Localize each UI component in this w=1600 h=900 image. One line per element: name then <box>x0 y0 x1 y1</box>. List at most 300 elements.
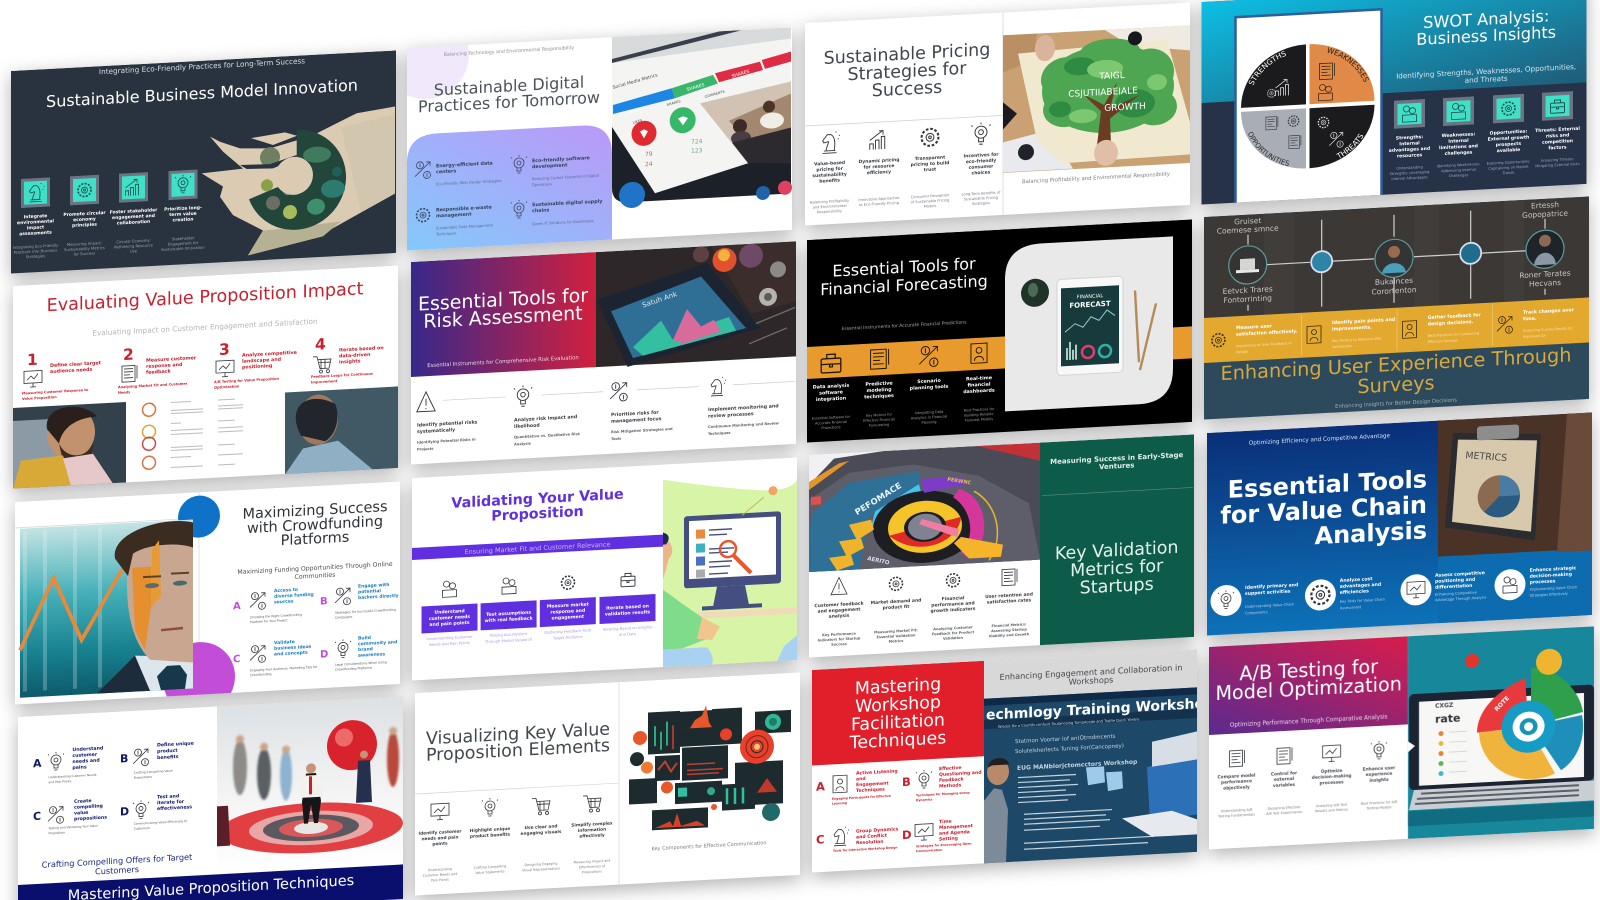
title: Platforms <box>281 530 349 549</box>
orange band: Identify pain points and <box>1332 318 1395 326</box>
icon tile 4 <box>168 170 198 200</box>
purple boxes <box>422 594 656 633</box>
white panel <box>1236 9 1382 207</box>
item labels: development <box>532 162 568 170</box>
subtitle: Identifying Strengths, Weaknesses, Opportunities, <box>1396 62 1576 81</box>
title: Sustainable Business Model Innovation <box>46 75 358 111</box>
notes: Legal Considerations When Using <box>335 660 387 667</box>
labels: Financial <box>942 596 964 602</box>
labels: Opportunities: <box>1490 130 1527 137</box>
item notes: Techniques <box>435 231 457 237</box>
labels: Strengths: <box>1396 135 1423 142</box>
labels: advantages and <box>1340 582 1381 590</box>
photo: training workshop board <box>984 687 1204 864</box>
labels: Foster stakeholder <box>110 208 157 216</box>
notes: Continuous Monitoring and Review <box>708 421 779 429</box>
labels: differentiation <box>1435 583 1472 591</box>
subtitle: Optimizing Performance Through Comparative Analysis <box>1230 714 1388 729</box>
labels: financial <box>968 381 991 389</box>
notes: Implementing Value Chain <box>1530 585 1577 592</box>
photo: bearded man <box>13 402 126 489</box>
notes: A/B Test Experiments <box>1266 810 1302 816</box>
notes: Strategies <box>972 201 990 206</box>
labels: Optimize <box>1321 769 1342 775</box>
letters: A <box>816 779 825 794</box>
subtitle: Customers <box>95 864 139 876</box>
subtitle: Ventures <box>1099 461 1134 471</box>
orange band: design decisions. <box>1428 319 1473 328</box>
box labels: and pain points <box>429 620 470 628</box>
slide: Sustainable Pricing Strategies <box>805 2 1190 226</box>
notes: Capitalizing on Market <box>1488 165 1529 171</box>
item labels: chains <box>532 207 550 214</box>
labels: benefits <box>819 178 840 185</box>
labels: Threats: External <box>1535 127 1580 134</box>
step notes: A/B Testing for Value Proposition <box>214 377 279 384</box>
title: Financial Forecasting <box>820 271 988 299</box>
notes: Financial Metrics: <box>992 622 1026 628</box>
item notes: Reducing Carbon Footprint in Digital <box>532 174 599 181</box>
photo: user journey diagram: Roner Terates <box>1519 268 1571 280</box>
letters: B <box>320 596 328 608</box>
notes: Understanding Customer Needs <box>48 773 96 779</box>
labels: information <box>578 826 606 834</box>
labels: Weaknesses: <box>1442 132 1475 139</box>
photo: social media metrics dashboard: COMMENTS <box>704 89 726 99</box>
labels: product fit <box>883 604 910 611</box>
notes: Strategies for Successful Crowdfunding <box>335 608 396 615</box>
title: Strategies for <box>848 59 967 85</box>
blue headings: sources <box>274 598 294 606</box>
photo: tablet with forecast <box>1005 236 1173 411</box>
labels: efficiency <box>867 169 891 176</box>
SWOT pie <box>1241 44 1374 168</box>
notes <box>250 608 396 677</box>
labels: insights <box>1369 777 1389 784</box>
photo: tablet on desk: Satuh Ank <box>641 290 679 309</box>
orange band: satisfaction effectively. <box>1236 328 1298 338</box>
notes: Gathering Feedback from <box>544 628 591 635</box>
blue headings: Engage with <box>358 583 389 590</box>
slide: Evaluating Value Proposition Impact <box>13 265 398 489</box>
labels: software <box>819 389 844 397</box>
orange band: improvements. <box>1332 325 1372 333</box>
labels: Integrate <box>24 214 47 220</box>
labels: pricing to build <box>911 160 949 168</box>
notes: Designing Engaging <box>525 861 557 867</box>
letters: D <box>902 828 912 842</box>
orange band: Satisfaction <box>1332 344 1353 349</box>
labels: engaging visuals <box>521 829 562 837</box>
notes: Propositions <box>134 775 152 780</box>
photo: tree of sustainable growth: TAIGL <box>1098 71 1125 82</box>
subtitle: Integrating Eco-Friendly Practices for Long-Term Success <box>99 56 305 76</box>
labels: Simplify complex <box>571 821 613 829</box>
notes <box>426 625 652 647</box>
item notes: Eco-Friendly Web Design Strategies <box>436 179 502 186</box>
notes: Analyzing Threats: <box>1541 157 1574 163</box>
labels: sustainability <box>812 171 847 179</box>
labels: Transparent <box>915 155 945 162</box>
photo: user journey diagram: Fontorrinting <box>1224 293 1272 305</box>
title: Sustainable Pricing <box>824 40 990 69</box>
labels: processes <box>1320 779 1344 786</box>
labels: satisfaction rates <box>987 597 1032 606</box>
supporting notes: Measuring Impact: <box>67 240 102 247</box>
notes: Forecasting <box>869 423 889 428</box>
headings: Management <box>939 823 974 831</box>
letters: A <box>33 757 42 770</box>
labels: Highlight unique <box>470 827 510 834</box>
purple band <box>412 535 663 560</box>
blue headings: backers directly <box>358 593 399 601</box>
SWOT pie: STRENGTHS <box>1248 50 1286 86</box>
step notes: Optimization <box>214 384 240 390</box>
headings: Define unique <box>157 742 194 749</box>
subtitle: Evaluating Impact on Customer Engagement and Satisfaction <box>92 317 318 338</box>
headings: Effective <box>939 766 962 772</box>
SWOT pie: WEAKNESSES <box>1328 47 1369 82</box>
labels: points <box>432 841 448 847</box>
title: Metrics for <box>1070 556 1164 581</box>
notes: Platform for Your Project <box>250 618 288 624</box>
supporting notes: Strategies <box>26 253 45 259</box>
labels: Internal <box>1399 140 1420 147</box>
slide: A/B Testing for Model Optimization <box>1209 626 1594 850</box>
orange band: Improved UX <box>1523 334 1546 339</box>
slide: Maximizing Success with Crowdfunding <box>15 481 400 724</box>
labels: advantages and <box>1389 146 1430 154</box>
notes: Analysis <box>514 442 531 446</box>
labels: Enhance strategic <box>1530 566 1576 574</box>
title: for Value Chain <box>1220 491 1427 530</box>
photo: man with chart overlay <box>20 519 193 698</box>
notes: Essential Software for <box>812 415 850 421</box>
letters <box>816 775 912 847</box>
notes: Understanding <box>1396 165 1423 171</box>
blue headings: potential <box>358 588 381 595</box>
notes: Addressing Internal <box>1441 168 1476 173</box>
labels: resources <box>1397 152 1422 160</box>
SWOT pie: THREATS <box>1336 134 1364 158</box>
icons <box>417 375 726 412</box>
labels: assessments <box>19 230 52 237</box>
title: Proposition Elements <box>426 736 610 766</box>
headings: benefits <box>157 754 179 761</box>
item labels: Eco-friendly software <box>532 156 590 164</box>
photo: training workshop board: echmlogy Training Worksho <box>986 696 1204 724</box>
photo: social media metrics dashboard: LIKE <box>628 108 639 116</box>
letters <box>233 596 328 665</box>
illustration: donut chart on laptop: CXGZ <box>1435 702 1454 710</box>
orange band: Design <box>1236 350 1248 354</box>
labels: integration <box>816 395 847 403</box>
subtitle: Balancing Technology and Environmental Responsibility <box>444 45 574 58</box>
item notes: Operations <box>532 182 552 187</box>
icon tile 2 <box>70 175 99 205</box>
notes: Accurate Financial <box>815 420 847 426</box>
photo: social media metrics dashboard <box>612 27 792 209</box>
labels: External growth <box>1488 134 1529 143</box>
labels: growth indicators <box>931 606 976 614</box>
labels: Analyze cost <box>1340 577 1372 584</box>
title: Startups <box>1080 575 1154 599</box>
grey subtitle band <box>984 649 1197 699</box>
step headings <box>50 346 384 374</box>
notes: Designing Effective <box>1268 805 1300 811</box>
subtitle: Optimizing Efficiency and Competitive Advantage <box>1249 433 1391 447</box>
box labels <box>429 598 650 628</box>
headings: effectiveness <box>157 804 192 812</box>
slide: SWOT Analysis <box>1202 0 1586 204</box>
notes: Internal Advantages <box>1391 175 1428 181</box>
slide: Essential Tools for Value Chain Analysis <box>1207 412 1592 636</box>
numbers <box>28 338 326 366</box>
headings: Resolution <box>856 839 884 846</box>
labels: product benefits <box>470 832 510 840</box>
supporting notes: Practices into Business <box>14 248 57 255</box>
headings: customer <box>72 752 98 759</box>
notes: Measuring Impact and <box>574 859 610 865</box>
gradient panel <box>407 124 612 251</box>
box labels: Understand <box>434 609 465 616</box>
notes: Components <box>1245 610 1268 615</box>
item labels: centers <box>436 168 456 175</box>
notes: Engaging Participants for Effective <box>832 794 891 801</box>
notes: Crowdfunding Platforms <box>335 666 373 672</box>
notes: Key Metrics for <box>866 412 892 418</box>
labels: choices <box>972 169 991 176</box>
step headings: Define clear target <box>50 361 101 369</box>
notes: Responsibility <box>817 209 843 214</box>
title: Visualizing Key Value <box>426 720 610 749</box>
band text: Ensuring Market Fit and Customer Relevance <box>464 540 611 556</box>
notes: Testing Models <box>1366 805 1392 811</box>
photo: user journey diagram: Gopopatrice <box>1522 209 1568 220</box>
labels <box>417 403 779 435</box>
labels: techniques <box>864 393 894 401</box>
title: Essential Tools for <box>832 254 976 281</box>
labels: risks and <box>1546 132 1569 140</box>
photo: performance gauge: PEFOMACE <box>854 481 904 518</box>
subtitle: Workshops <box>1069 674 1113 687</box>
blue headings: community and <box>358 639 397 647</box>
notes: Viability and Growth <box>989 632 1030 638</box>
notes: Projections <box>821 425 841 430</box>
title: Maximizing Success <box>242 499 388 523</box>
navy band <box>18 864 403 900</box>
notes: Challenges <box>1449 173 1469 178</box>
headings: Test and <box>157 794 179 801</box>
labels: Real-time <box>966 376 992 382</box>
step headings: insights <box>339 358 361 366</box>
title: Evaluating Value Proposition Impact <box>47 279 364 316</box>
letters: B <box>902 775 911 789</box>
labels: Internal <box>1448 138 1469 145</box>
labels: factors <box>1548 144 1567 151</box>
title: Success <box>872 78 942 101</box>
title: with Crowdfunding <box>247 514 383 537</box>
labels: Customer feedback <box>814 602 864 609</box>
letters: B <box>120 752 128 766</box>
labels: dashboards <box>963 388 995 395</box>
labels: for resource <box>863 163 895 171</box>
labels <box>1218 765 1396 792</box>
notes: Models <box>924 204 936 209</box>
blue headings: business ideas <box>274 644 312 652</box>
notes: Tools <box>611 437 621 441</box>
labels <box>813 375 995 403</box>
labels: Control for <box>1271 771 1297 778</box>
headings: Feedback <box>939 776 965 784</box>
notes: Quantitative vs. Qualitative Risk <box>514 432 580 439</box>
orange band: Gather feedback for <box>1428 313 1481 321</box>
labels: Value-based <box>814 161 845 168</box>
icons <box>442 571 635 597</box>
notes: Forecast Models <box>965 417 993 423</box>
supporting notes: Stakeholder <box>172 235 194 241</box>
slide: Mastering Workshop Facilitation <box>812 649 1204 873</box>
notes: Innovative Approaches <box>858 196 900 202</box>
icons <box>250 588 351 663</box>
subtitle: Communities <box>295 572 335 581</box>
headings <box>72 741 194 822</box>
notes: Analyzing A/B Test <box>1316 803 1347 808</box>
title: Model Optimization <box>1215 672 1402 705</box>
photo: man in blue shirt <box>285 386 398 474</box>
box labels: engagement <box>552 614 585 622</box>
notes: Best Practices for <box>964 407 994 413</box>
step notes: Analyzing Market Fit and Customer <box>118 382 188 389</box>
notes: Customers <box>134 826 150 831</box>
subtitle: Enhancing Engagement and Collaboration in <box>1000 662 1182 682</box>
box labels: Iterate based on <box>606 604 649 612</box>
letters: C <box>233 654 240 665</box>
headings: product <box>157 748 178 755</box>
notes: Risk Mitigation Strategies and <box>611 427 673 434</box>
headings: pains <box>72 764 87 771</box>
notes: Integrating Data <box>915 410 943 415</box>
step headings: feedback <box>146 369 172 376</box>
labels: Implement monitoring and <box>708 404 779 413</box>
headings: Engagement <box>856 780 889 788</box>
headings: and Conflict <box>856 833 888 840</box>
headings: Group Dynamics <box>856 827 898 835</box>
illustration: donut chart on laptop <box>1408 626 1594 839</box>
photo: user journey diagram: Eetvck Trares <box>1223 284 1273 296</box>
headings: Understand <box>72 746 103 753</box>
labels: impact <box>27 224 45 231</box>
blue headings: and concepts <box>274 650 308 658</box>
notes: Communicating Value Effectively to <box>134 819 187 826</box>
item notes: Sustainable Data Management <box>436 223 493 230</box>
numbers: 2 <box>123 346 134 364</box>
notes: Visual Representations <box>522 866 560 872</box>
notes: Testing Assumptions <box>490 632 527 638</box>
title: Techniques <box>849 728 946 754</box>
headings: compelling <box>74 803 103 811</box>
dashboard illustration <box>629 701 791 832</box>
notes: Choosing the Right Crowdfunding <box>250 613 302 619</box>
icons <box>1230 740 1387 767</box>
labels: performance <box>1221 778 1252 786</box>
labels: external <box>1274 776 1295 783</box>
step headings: positioning <box>242 363 273 371</box>
step headings: data-driven <box>339 352 371 360</box>
notes: Customer Needs and <box>423 872 457 878</box>
item icons <box>415 155 527 224</box>
notes: Proposition <box>49 830 65 835</box>
photo: tablet on desk <box>596 241 796 369</box>
notes: Techniques <box>708 431 731 436</box>
notes: Testing Fundamentals <box>1217 813 1255 819</box>
slide: Sustainable Digital Practices <box>407 28 792 250</box>
notes: Trends <box>1502 171 1514 175</box>
labels: objectively <box>1223 784 1250 792</box>
labels: modeling <box>866 387 892 394</box>
illustration: donut chart on laptop: ROTE <box>1493 695 1511 713</box>
notes <box>423 859 610 883</box>
labels: competition <box>1542 138 1573 146</box>
headings: propositions <box>74 815 107 822</box>
icons <box>24 355 331 389</box>
photo: tablet with forecast: FINANCIAL <box>1077 293 1103 301</box>
labels: Prioritize long- <box>164 206 202 213</box>
labels: prospects <box>1496 141 1521 148</box>
notes: Effectiveness of <box>579 864 606 869</box>
notes: Key Tools for Value Chain <box>1340 597 1385 604</box>
labels: Dynamic pricing <box>859 158 899 165</box>
labels: Use clear and <box>525 824 557 831</box>
labels: engagement and <box>112 213 155 221</box>
donut rings and text lines <box>142 398 243 470</box>
notes: Advantage Through Analysis <box>1435 596 1486 602</box>
photo: training workshop board: Solutelsherlects Tuning For(Cancopney) <box>1015 743 1124 755</box>
step headings: audience needs <box>50 367 92 375</box>
title: Business Insights <box>1416 23 1556 49</box>
numbers: 3 <box>219 340 230 359</box>
notes <box>832 789 972 858</box>
notes: Propositions <box>582 869 602 874</box>
icons <box>821 343 987 373</box>
item notes <box>435 174 599 237</box>
notes: Communication <box>916 848 942 853</box>
title: Essential Tools <box>1228 465 1427 504</box>
box labels: response and <box>550 608 585 616</box>
caption: Key Components for Effective Communication <box>651 840 767 852</box>
labels: processes <box>1530 578 1556 586</box>
title: Analysis <box>1315 516 1427 550</box>
step notes <box>22 372 373 401</box>
notes: Crafting Compelling Value <box>134 769 173 775</box>
notes <box>818 622 1030 648</box>
labels <box>812 152 999 185</box>
photo: user journey diagram: Hecvans <box>1529 278 1561 289</box>
notes: Indicators for Startup <box>818 636 861 643</box>
notes: Results and Metrics <box>1315 808 1348 814</box>
photo: user journey diagram: Corortenton <box>1372 285 1417 297</box>
photo: training workshop board: Statmon Voortar Iof an(Otrndmcents <box>1015 734 1116 745</box>
labels: review processes <box>708 411 754 420</box>
labels: Identify primary and <box>1245 583 1298 591</box>
notes: Metrics <box>889 639 903 644</box>
notes: Techniques for Managing Group <box>916 791 970 797</box>
labels: available <box>1497 147 1520 154</box>
photo: user journey diagram: Coemese smnce <box>1217 223 1279 236</box>
headings: Questioning and <box>939 770 982 778</box>
notes <box>48 768 187 835</box>
step notes: Value Proposition <box>22 395 57 401</box>
